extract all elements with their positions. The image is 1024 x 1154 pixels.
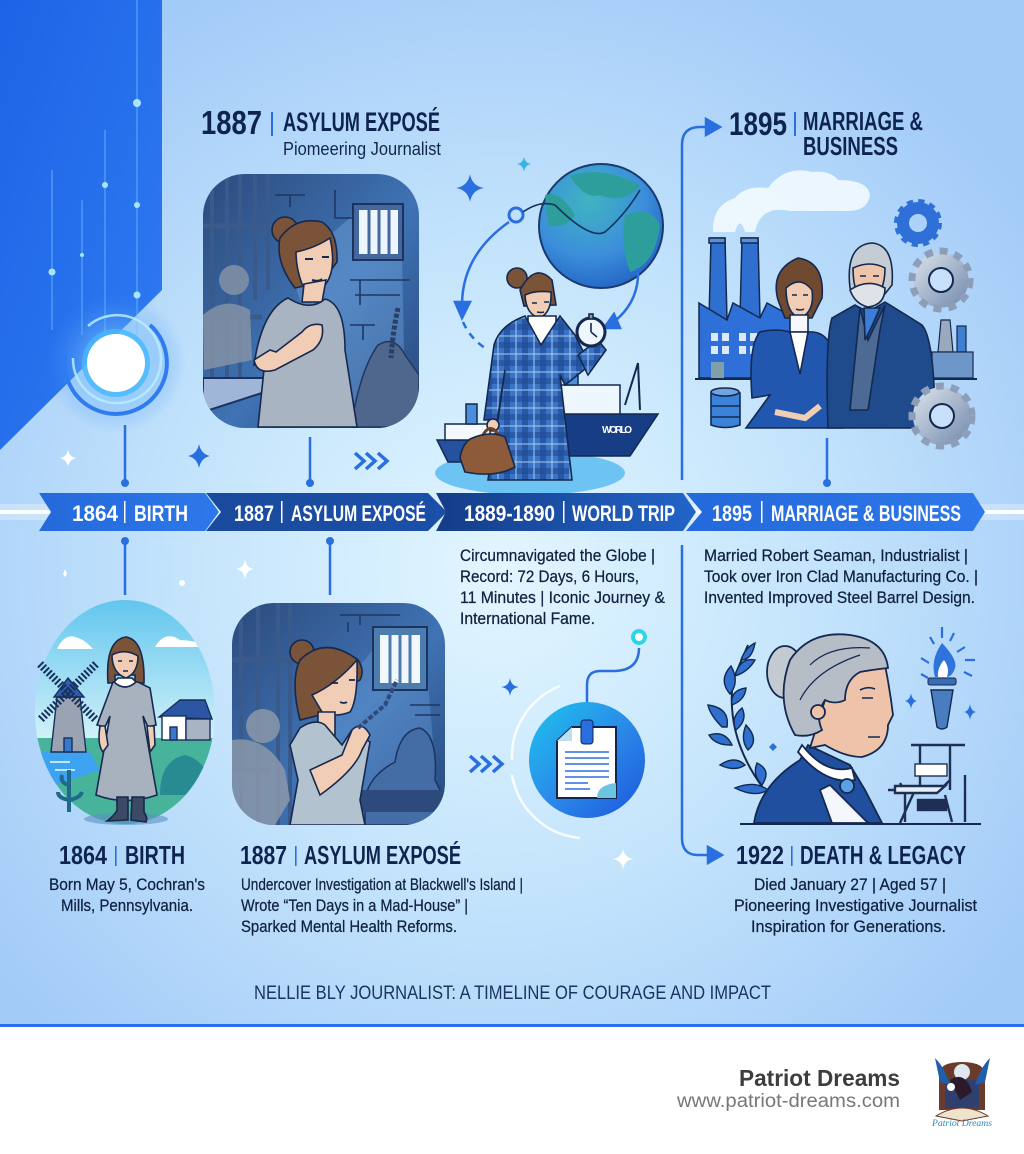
text block: 1887 asylum exposé: Sparked Mental Health Reforms. [241, 917, 457, 936]
chevrons [470, 756, 502, 772]
text block: 1922 death and legacy: 1922 [736, 840, 784, 870]
corner panel with glowing orb [0, 0, 186, 450]
text: marriage and business details [704, 546, 978, 607]
farmhouse [159, 700, 212, 740]
segment 1889-1890 [436, 493, 696, 531]
illustration: asylum cell with woman at top [203, 174, 419, 428]
woman in plaid coat [460, 268, 606, 480]
footer band [0, 1024, 1024, 1154]
torch [921, 627, 975, 729]
illustration: globe and world traveller [435, 157, 663, 495]
prisoner behind bars [232, 709, 290, 825]
hooded prisoner on bed [360, 728, 445, 825]
text block: 1864 birth: Mills, Pennsylvania. [61, 896, 193, 915]
text block: 1887 asylum exposé: Undercover Investigation at Blackwell's Island | [241, 875, 523, 894]
segment 1887: ASYLUM EXPOSÉ [291, 501, 426, 526]
illustration: girl with windmill and farmhouse [35, 600, 215, 828]
steel barrel [711, 388, 740, 428]
cell bars [232, 603, 293, 825]
text block: 1887 asylum exposé: ASYLUM EXPOSÉ [304, 840, 461, 870]
text block: 1864 birth [49, 840, 205, 915]
bed [203, 378, 265, 412]
ground line [695, 378, 977, 380]
heading: 1887 asylum exposé: Piomeering Journalist [283, 139, 441, 159]
illustration: factory, couple and gears [695, 170, 977, 446]
connector: 1887 top [306, 437, 314, 487]
segment 1864: BIRTH [134, 501, 188, 526]
text: marriage and business details: Took over Iron Clad Manufacturing Co. | [704, 567, 978, 586]
heading: 1895 marriage & business: MARRIAGE & [803, 106, 923, 136]
cell bars [203, 174, 270, 395]
footer brand: Patriot Dreams [739, 1065, 900, 1091]
segment 1887 [206, 493, 447, 531]
factory windows [711, 333, 757, 378]
text: world trip details: International Fame. [460, 609, 595, 628]
text: world trip details: Circumnavigated the Globe | [460, 546, 655, 565]
ground line [740, 823, 981, 825]
steamships: WORLO [602, 425, 632, 436]
woman in victorian dress [746, 258, 843, 428]
footer brand: www.patriot-dreams.com [676, 1091, 900, 1112]
heading: 1895 marriage & business: BUSINESS [803, 131, 898, 161]
globe [539, 164, 663, 288]
heading: 1887 asylum exposé [201, 104, 441, 159]
steamships [437, 362, 658, 462]
horizontal glowing timeline beam [0, 504, 1024, 520]
huddled prisoner and chain [351, 308, 419, 427]
man in suit [827, 243, 935, 428]
factory [699, 238, 795, 378]
text block: 1864 birth: BIRTH [125, 840, 185, 870]
prisoner behind bars [203, 265, 252, 370]
ground shadow [84, 813, 168, 825]
footer logo: Patriot Dreams [931, 1118, 993, 1128]
icon: document circle with wire [512, 631, 645, 838]
cell window [373, 627, 427, 690]
connector: 1864 top [121, 425, 129, 487]
cell window [353, 204, 403, 260]
sparkle [188, 444, 210, 468]
illustration: elderly woman with laurel, torch and press [708, 627, 981, 825]
smoke clouds [713, 170, 870, 232]
illustration: asylum cell with woman and chain [232, 603, 445, 825]
text: world trip details: Record: 72 Days, 6 Hours, [460, 567, 639, 586]
text block: 1922 death and legacy: DEATH & LEGACY [800, 840, 966, 870]
text block: 1922 death and legacy: Died January 27 | Aged 57 | [754, 875, 946, 894]
windmill [40, 664, 96, 752]
segment 1864 [39, 493, 219, 531]
printing press [888, 745, 965, 823]
sparkles [456, 157, 531, 202]
segment 1864: 1864 [72, 501, 119, 526]
text: marriage and business details: Married Robert Seaman, Industrialist | [704, 546, 968, 565]
text: world trip details: 11 Minutes | Iconic Journey & [460, 588, 666, 607]
water [435, 451, 625, 495]
sparkles [501, 678, 634, 870]
heading: 1887 asylum exposé: ASYLUM EXPOSÉ [283, 106, 440, 137]
segment 1895: MARRIAGE & BUSINESS [771, 501, 961, 526]
banner chevrons [39, 493, 985, 531]
heading: 1895 marriage & business: 1895 [729, 106, 787, 142]
heading: 1895 marriage & business [729, 106, 923, 161]
text block: 1887 asylum exposé: Wrote “Ten Days in a Mad-House” | [241, 896, 468, 915]
connector: 1887 bottom [326, 537, 334, 595]
woman bust [754, 634, 893, 823]
text: world trip details [460, 546, 666, 628]
connector: 1895 top [823, 438, 831, 487]
sparkles [63, 559, 254, 586]
footer brand [676, 1065, 900, 1112]
text block: 1922 death and legacy [734, 840, 977, 936]
segment 1889-1890: WORLD TRIP [572, 501, 675, 526]
sparkle [60, 449, 76, 467]
footer logo [931, 1058, 993, 1128]
segment 1895 [686, 493, 985, 531]
text block: 1922 death and legacy: Inspiration for Generations. [751, 917, 946, 936]
text block: 1887 asylum exposé: 1887 [240, 840, 287, 870]
woman in grey dress [254, 217, 357, 427]
text block: 1922 death and legacy: Pioneering Investigative Journalist [734, 896, 977, 915]
text block: 1887 asylum exposé [240, 840, 523, 936]
segment 1889-1890: 1889-1890 [464, 501, 555, 526]
woman holding chain [290, 640, 397, 825]
gears [897, 202, 972, 446]
text block: 1864 birth: Born May 5, Cochran's [49, 875, 205, 894]
laurel branch [708, 643, 768, 794]
plant [58, 770, 82, 812]
small factory [932, 320, 973, 378]
small sparkles [769, 693, 976, 751]
text block: 1864 birth: 1864 [59, 840, 107, 870]
arrow line to 1895 [682, 119, 720, 480]
segment 1887: 1887 [234, 501, 274, 526]
segment 1895: 1895 [712, 501, 752, 526]
title: NELLIE BLY JOURNALIST: A TIMELINE OF COURAGE AND IMPACT [254, 983, 771, 1004]
arrow line to 1922 [682, 545, 722, 863]
heading: 1887 asylum exposé: 1887 [201, 104, 262, 141]
girl in grey dress [96, 637, 157, 822]
route arcs [455, 190, 640, 348]
text: marriage and business details: Invented Improved Steel Barrel Design. [704, 588, 975, 607]
connector: 1864 bottom [121, 537, 129, 595]
chevrons [355, 453, 387, 469]
